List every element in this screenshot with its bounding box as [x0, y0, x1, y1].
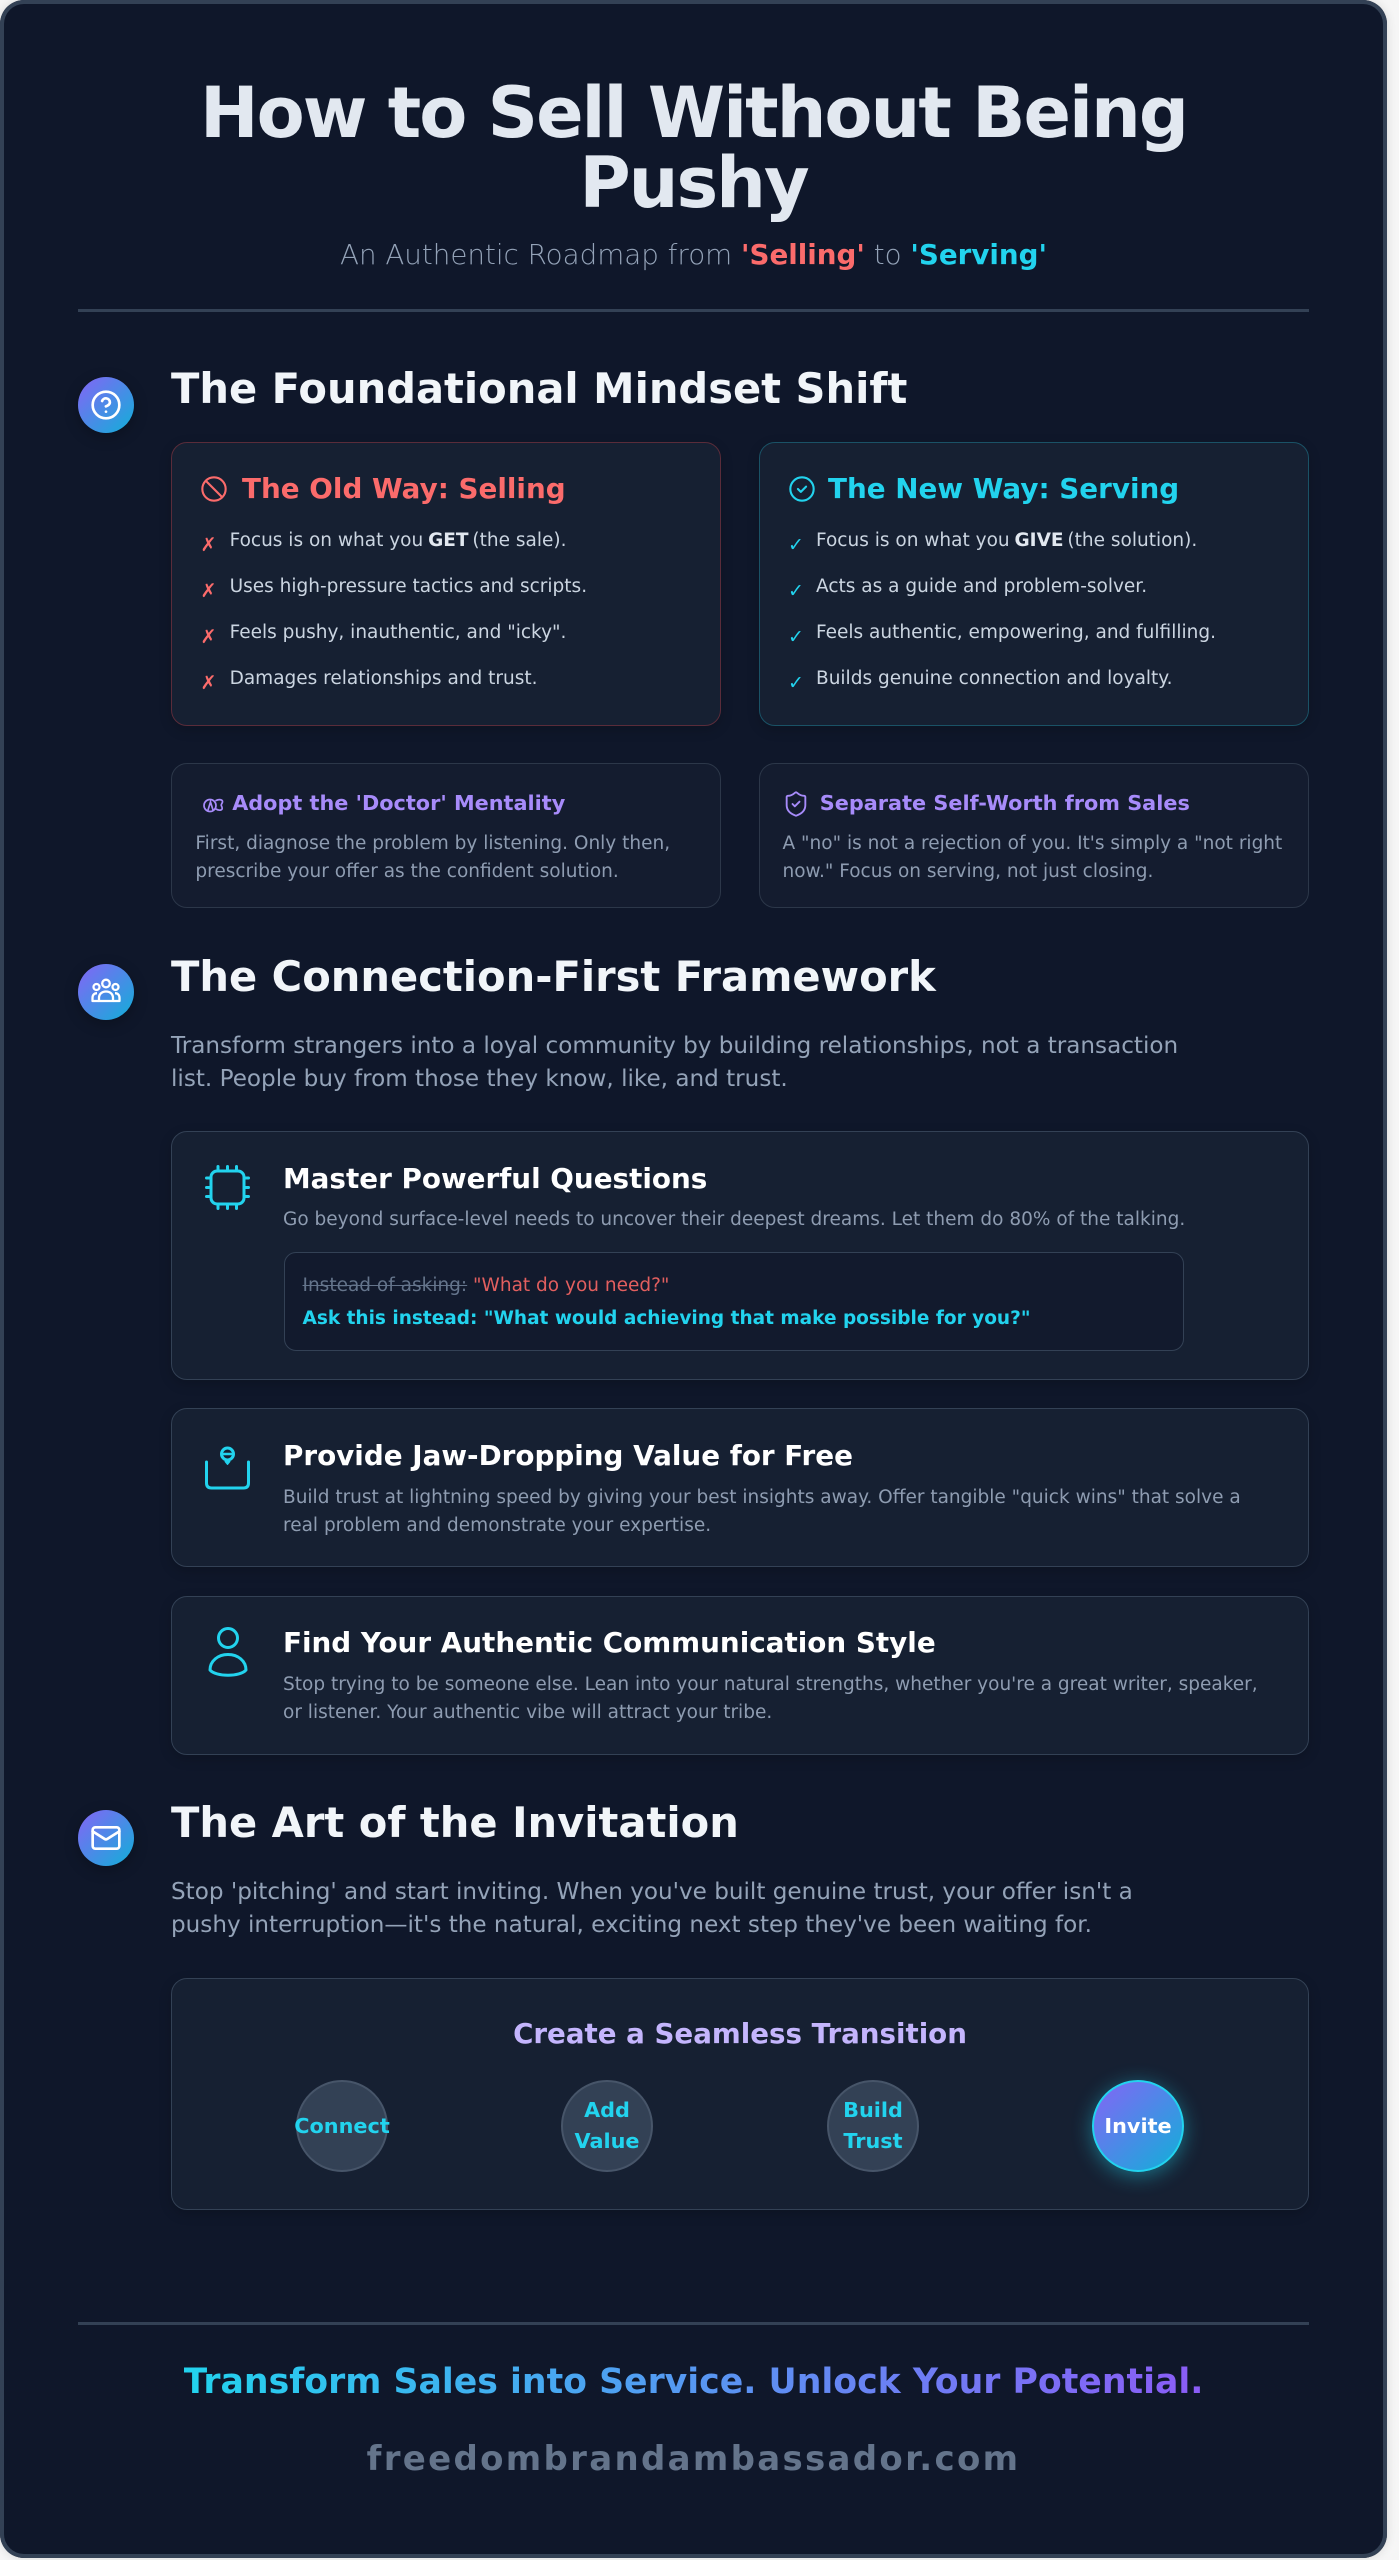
- panel: self-worth tip: [759, 763, 1309, 908]
- x mark list: [200, 530, 587, 694]
- footer tagline: Transform Sales into Service. Unlock Your Potential.: [184, 2362, 1203, 2402]
- card text: Go beyond surface-level needs to uncover their deepest dreams. Let them do 80% of the talking.: [283, 1209, 1185, 1230]
- check mark 2: ✓: [788, 580, 804, 602]
- icon: inbox with pin: [205, 1446, 250, 1490]
- step: invite: Invite: [1104, 2114, 1172, 2138]
- icon: prohibited: [201, 476, 227, 502]
- panel: master powerful questions: [171, 1131, 1309, 1380]
- new way item 4: Builds genuine connection and loyalty.: [816, 668, 1172, 689]
- icon: envelope: [78, 1810, 134, 1866]
- old way item 2: Uses high-pressure tactics and scripts.: [230, 576, 587, 597]
- old way heading: The Old Way: Selling: [242, 472, 566, 505]
- title: Pushy: [579, 142, 808, 224]
- icon: question mark: [78, 377, 134, 433]
- panel: new way serving: [759, 442, 1309, 726]
- panel: doctor mentality tip: [171, 763, 721, 908]
- x mark 2: ✗: [200, 580, 216, 602]
- panel: provide value for free: [171, 1408, 1309, 1567]
- section description: [171, 1879, 1133, 1938]
- self-worth tip heading: Separate Self-Worth from Sales: [820, 791, 1190, 815]
- self-worth tip text: [782, 832, 1282, 882]
- step: build trust: Build: [843, 2098, 903, 2122]
- panel: seamless transition: [171, 1978, 1309, 2210]
- check mark 3: ✓: [788, 626, 804, 648]
- step: add value: Value: [574, 2129, 640, 2153]
- question swap callout: [284, 1252, 1184, 1351]
- old way item 4: Damages relationships and trust.: [230, 668, 537, 689]
- section: the connection-first framework: [78, 952, 1309, 1755]
- panel heading: Create a Seamless Transition: [513, 2017, 967, 2050]
- self-worth tip text: A "no" is not a rejection of you. It's simply a "not right: [782, 832, 1282, 854]
- section: the foundational mindset shift: [78, 364, 1309, 908]
- card text: or listener. Your authentic vibe will attract your tribe.: [283, 1702, 772, 1723]
- card title: Provide Jaw-Dropping Value for Free: [283, 1438, 853, 1472]
- doctor tip text: prescribe your offer as the confident solution.: [195, 860, 619, 882]
- section heading: The Connection-First Framework: [171, 952, 936, 1001]
- old way item 3: Feels pushy, inauthentic, and "icky".: [230, 622, 566, 643]
- step: build trust: Trust: [843, 2129, 903, 2153]
- header: [78, 72, 1309, 312]
- step: add value: Add: [584, 2098, 630, 2122]
- old way item 1: Focus is on what you GET (the sale).: [230, 530, 566, 551]
- doctor tip text: First, diagnose the problem by listening. Only then,: [195, 832, 670, 854]
- doctor tip heading: Adopt the 'Doctor' Mentality: [232, 791, 565, 815]
- section heading: The Foundational Mindset Shift: [171, 364, 907, 413]
- card title: Find Your Authentic Communication Style: [283, 1626, 936, 1659]
- section heading: The Art of the Invitation: [171, 1798, 739, 1847]
- footer divider: [78, 2322, 1309, 2325]
- step: build trust: [827, 2080, 919, 2172]
- step: connect: Connect: [294, 2114, 390, 2138]
- section: the art of the invitation: [78, 1798, 1309, 2210]
- section description: [170, 1033, 1178, 1092]
- footer: [78, 2322, 1309, 2479]
- check mark 4: ✓: [788, 672, 804, 694]
- ask this instead line: Ask this instead: "What would achieving that make possible for you?": [302, 1308, 1030, 1329]
- icon: community: [78, 964, 134, 1020]
- instead of asking line: Instead of asking: "What do you need?": [302, 1275, 669, 1296]
- panel: old way selling: [171, 442, 721, 726]
- new way item 3: Feels authentic, empowering, and fulfilling.: [816, 622, 1216, 643]
- card text: [283, 1487, 1241, 1536]
- card title: Master Powerful Questions: [283, 1162, 707, 1194]
- icon: shield check: [786, 791, 806, 817]
- step: invite: [1092, 2080, 1184, 2172]
- step: add value: [561, 2080, 653, 2172]
- x mark 3: ✗: [200, 626, 216, 648]
- icon: person: [208, 1627, 248, 1677]
- new way heading: The New Way: Serving: [828, 472, 1179, 505]
- section description: pushy interruption—it's the natural, exciting next step they've been waiting for.: [171, 1912, 1092, 1938]
- card text: Stop trying to be someone else. Lean into your natural strengths, whether you're a great writer, speaker,: [283, 1674, 1258, 1695]
- section description: Stop 'pitching' and start inviting. When you've built genuine trust, your offer isn't a: [171, 1879, 1133, 1905]
- icon: brain: [203, 798, 224, 812]
- step: connect: [296, 2080, 388, 2172]
- doctor tip text: [195, 832, 670, 882]
- x mark 4: ✗: [200, 672, 216, 694]
- new way item 2: Acts as a guide and problem-solver.: [816, 576, 1147, 597]
- footer website: freedombrandambassador.com: [367, 2439, 1020, 2479]
- icon: chip: [205, 1165, 250, 1210]
- x mark 1: ✗: [200, 534, 216, 556]
- card text: [283, 1674, 1258, 1723]
- header divider: [78, 309, 1309, 312]
- self-worth tip text: now." Focus on serving, not just closing.: [782, 860, 1153, 882]
- title: How to Sell Without Being: [200, 72, 1187, 154]
- new way item 1: Focus is on what you GIVE (the solution).: [816, 530, 1197, 551]
- check mark 1: ✓: [788, 534, 804, 556]
- check mark list: [788, 530, 1216, 694]
- card text: Build trust at lightning speed by giving your best insights away. Offer tangible "quick wins" that solve a: [283, 1487, 1241, 1508]
- section description: Transform strangers into a loyal community by building relationships, not a transaction: [171, 1033, 1178, 1059]
- subtitle: An Authentic Roadmap from 'Selling' to 'Serving': [340, 238, 1047, 270]
- card text: real problem and demonstrate your expertise.: [283, 1515, 711, 1536]
- icon: check circle: [789, 476, 815, 502]
- section description: list. People buy from those they know, like, and trust.: [171, 1066, 788, 1092]
- panel: authentic communication style: [171, 1596, 1309, 1755]
- title: [200, 72, 1187, 224]
